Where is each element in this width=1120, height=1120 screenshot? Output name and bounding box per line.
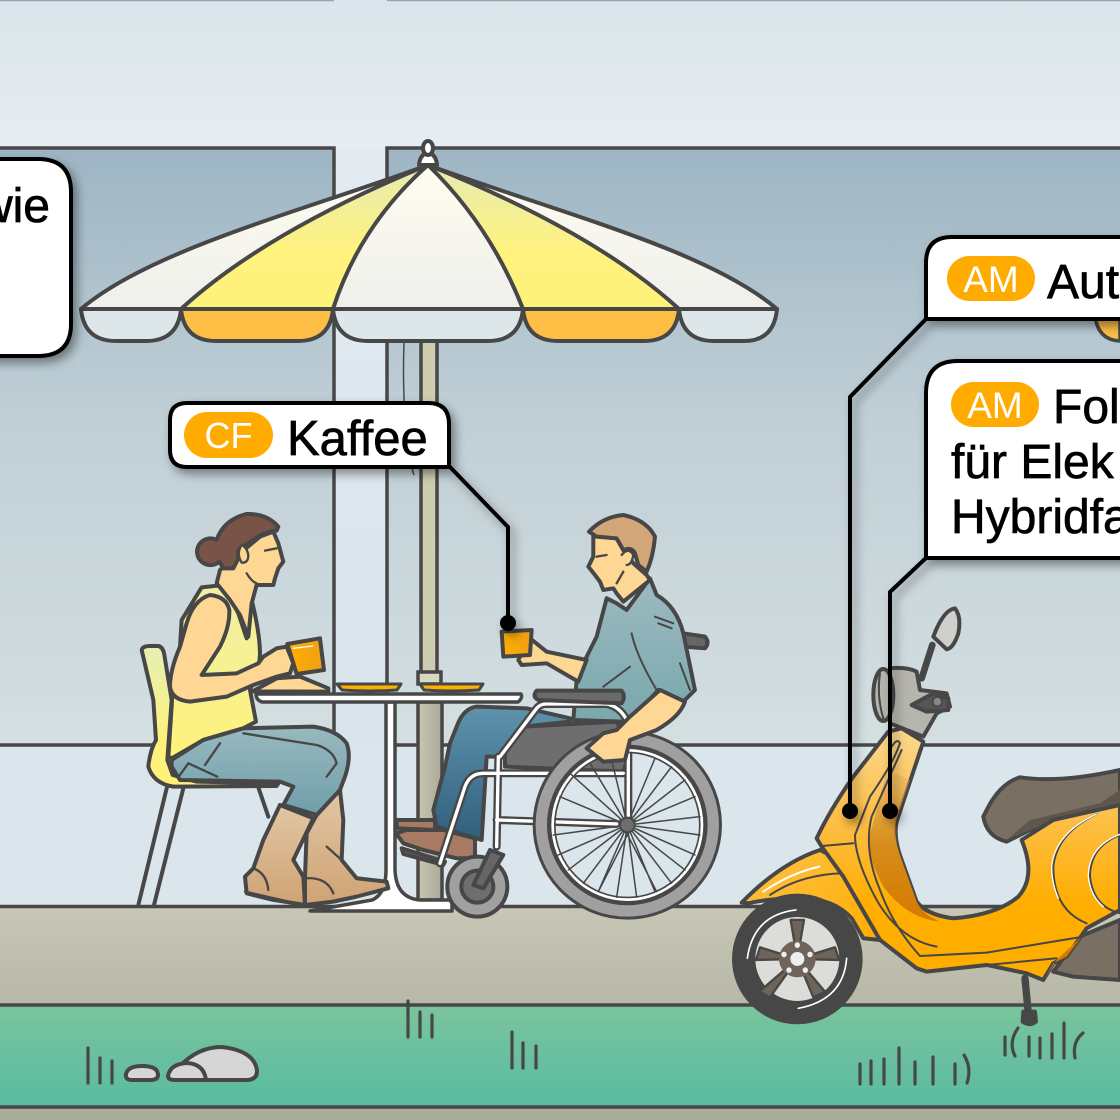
hair	[197, 514, 278, 568]
handle grip	[912, 693, 948, 712]
arm	[170, 595, 293, 702]
callout: Fol: für Elek	[951, 436, 1115, 489]
parasol pole and cable	[404, 340, 442, 900]
callout: Aut: AM	[963, 259, 1019, 300]
neck and face	[217, 532, 283, 637]
chair	[138, 646, 278, 905]
woman on chair	[138, 514, 388, 905]
callout: Kaffee: CF	[204, 415, 252, 456]
hair	[589, 515, 655, 572]
body lines	[822, 741, 1083, 965]
front wheel	[732, 894, 863, 1024]
leader lines	[450, 319, 926, 819]
shirt	[573, 578, 695, 722]
wheelchair frame tubes	[440, 704, 628, 863]
kickstand	[1025, 978, 1028, 1013]
callout: Aut: Aut	[1047, 256, 1119, 309]
scooter	[732, 608, 1120, 1024]
seat	[983, 770, 1120, 842]
boot details	[245, 847, 342, 905]
sidewalk	[0, 906, 1120, 1005]
armrest	[535, 691, 624, 703]
parasol canopy	[81, 141, 777, 341]
arm holding cup	[518, 638, 587, 682]
front boot	[245, 805, 313, 905]
front fender	[742, 850, 880, 940]
backrest	[623, 663, 660, 727]
arm and hand on wheel	[587, 690, 685, 762]
headlight housing	[890, 668, 950, 737]
jeans	[172, 727, 349, 815]
face and neck	[588, 536, 650, 602]
grass strip	[0, 1005, 1120, 1120]
callout: Fol: AM	[967, 385, 1023, 426]
large wheel	[541, 739, 713, 911]
callout: Fol	[926, 361, 1120, 558]
callout: cut-off text panel	[0, 159, 71, 356]
caster wheel	[447, 850, 507, 917]
back boot	[305, 790, 388, 905]
coffee mug	[287, 638, 324, 674]
callout: Kaffee	[170, 403, 449, 467]
rear parasol fragment	[1095, 316, 1120, 341]
coffee cup	[502, 630, 532, 657]
mirror	[933, 608, 959, 649]
side panel arcs	[1053, 814, 1097, 923]
mirror stem	[922, 645, 932, 678]
stones	[126, 1047, 257, 1080]
body and leg shield	[817, 728, 1120, 980]
table	[256, 684, 522, 911]
grass tufts	[88, 1001, 1083, 1084]
callout: Aut	[926, 237, 1120, 319]
underbody	[1053, 920, 1120, 980]
second hand	[253, 677, 328, 692]
shoes	[397, 820, 435, 830]
callout: Kaffee: Kaffee	[287, 412, 428, 466]
backrest handle	[683, 633, 707, 648]
tank top	[168, 585, 260, 758]
leg shield shading	[869, 770, 940, 922]
man in wheelchair	[396, 515, 713, 917]
jeans	[433, 707, 570, 840]
callout: Fol: Fol	[1053, 381, 1120, 434]
seat	[505, 722, 632, 772]
